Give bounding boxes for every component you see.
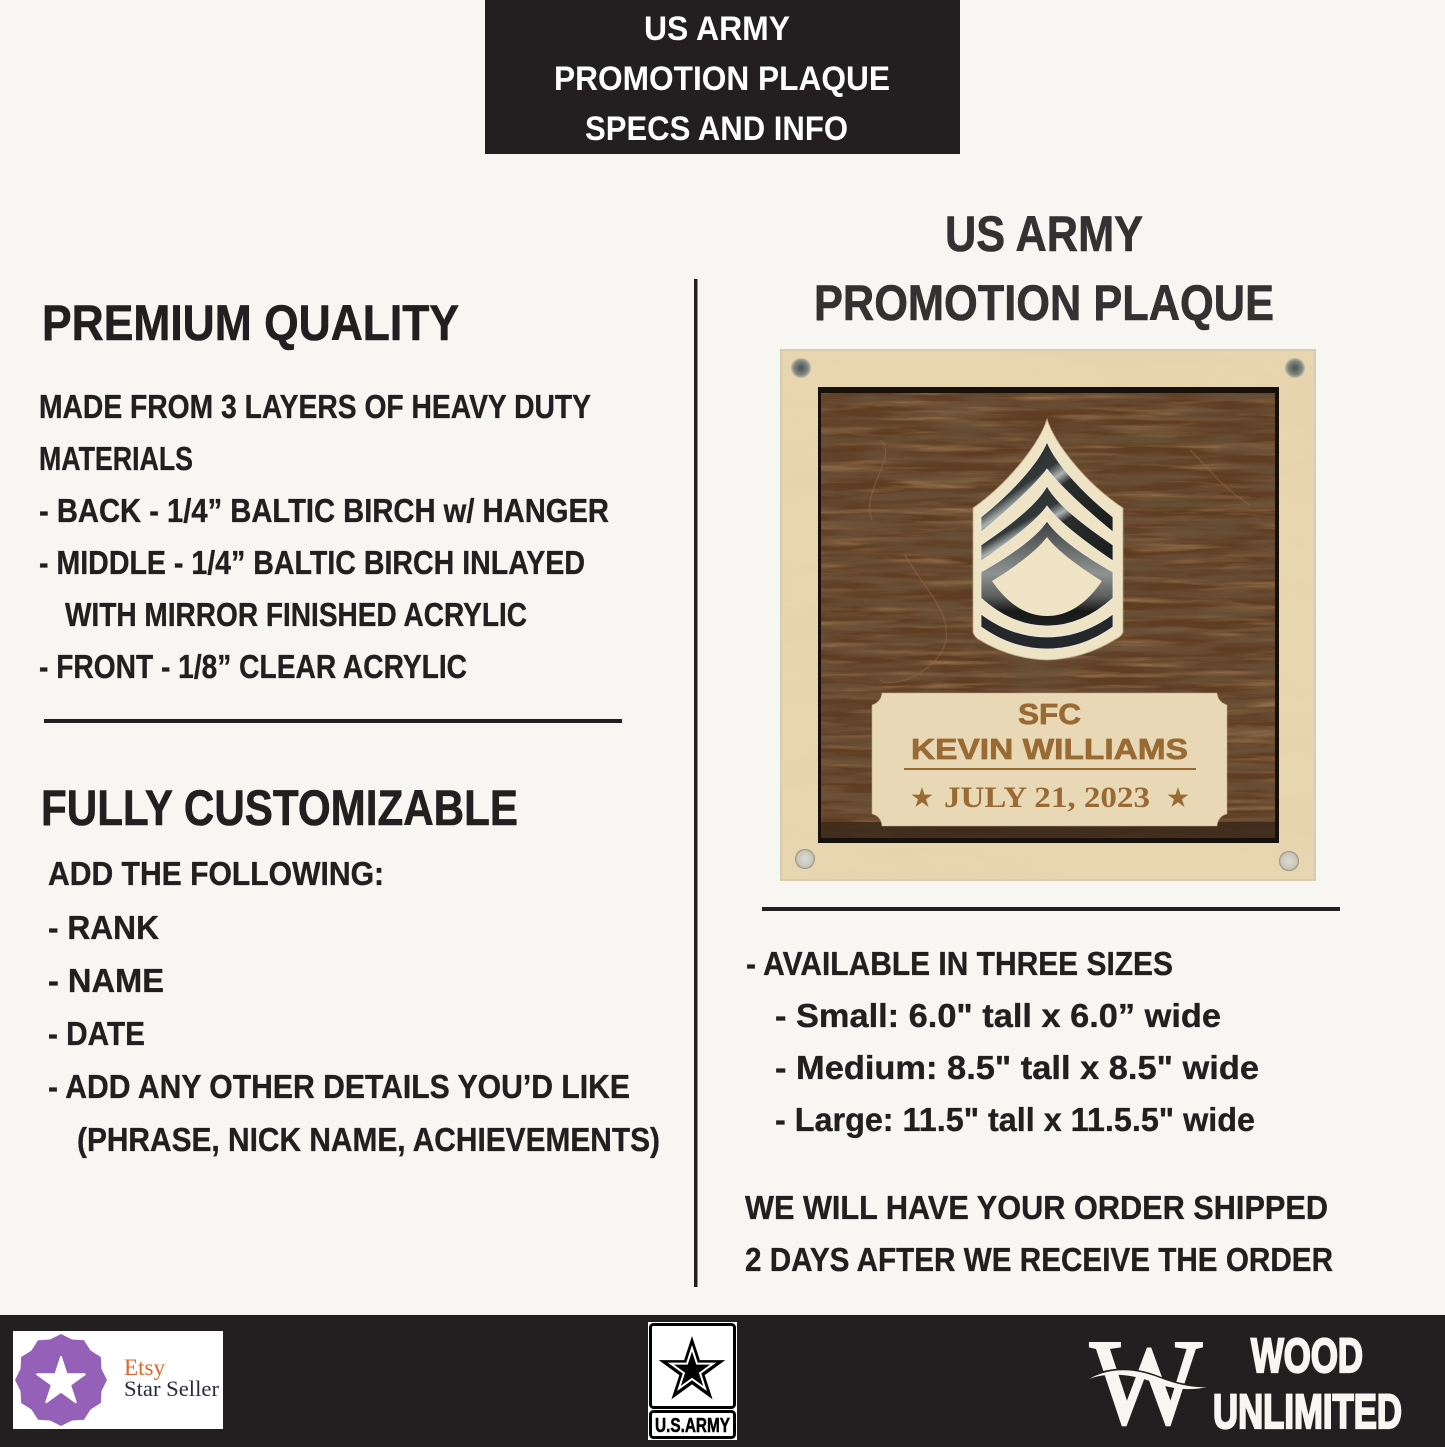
engraved name plate (872, 693, 1227, 826)
stained wood panel (818, 387, 1279, 843)
engraved name plate: SFC (1018, 699, 1081, 731)
etsy star seller badge: Etsy (124, 1355, 166, 1380)
text block: customization options: ADD THE FOLLOWING: (48, 855, 384, 892)
text block: available sizes: - Medium: 8.5" tall x 8.5" wide (775, 1049, 1259, 1086)
icon: w monogram with swoosh: W (1090, 1315, 1202, 1447)
heading: fully customizable: FULLY CUSTOMIZABLE (41, 780, 518, 836)
text block: customization options: - DATE (48, 1015, 145, 1052)
text block: customization options: - NAME (48, 962, 164, 999)
text block: materials: WITH MIRROR FINISHED ACRYLIC (65, 596, 527, 633)
panel: fully customizable (41, 780, 660, 1158)
text block: customization options: - ADD ANY OTHER DETAILS YOU’D LIKE (48, 1068, 630, 1105)
etsy star seller badge (13, 1331, 223, 1429)
text block: available sizes: - Small: 6.0" tall x 6.0” wide (775, 997, 1221, 1034)
title banner: SPECS AND INFO (585, 110, 848, 148)
footer bar (0, 1315, 1445, 1447)
screws (791, 358, 1305, 871)
title banner: PROMOTION PLAQUE (554, 60, 890, 98)
heading: us army promotion plaque: US ARMY (945, 206, 1143, 262)
text block: materials: - BACK - 1/4” BALTIC BIRCH w/ HANGER (39, 492, 609, 529)
text block: materials: MATERIALS (39, 440, 193, 477)
engraved name plate: JULY 21, 2023 (944, 781, 1150, 814)
us army logo: U.S.ARMY (655, 1415, 730, 1437)
text block: customization options (48, 855, 660, 1158)
heading: us army promotion plaque (814, 206, 1274, 331)
etsy star seller badge: Star Seller (124, 1376, 220, 1401)
wood unlimited logo: WOOD (1251, 1330, 1363, 1383)
rank insignia chevrons (973, 419, 1123, 660)
engraved name plate: KEVIN WILLIAMS (911, 734, 1188, 766)
text block: materials: - FRONT - 1/8” CLEAR ACRYLIC (39, 648, 467, 685)
text block: shipping note: WE WILL HAVE YOUR ORDER SHIPPED (745, 1189, 1328, 1226)
text block: customization options: (PHRASE, NICK NAME, ACHIEVEMENTS) (77, 1121, 660, 1158)
panel: premium quality (39, 295, 609, 685)
title banner (485, 0, 960, 154)
plaque photo (780, 349, 1316, 881)
text block: shipping note (745, 1189, 1333, 1278)
text block: customization options: - RANK (48, 909, 159, 946)
text block: available sizes: - Large: 11.5" tall x 11.5.5" wide (775, 1101, 1255, 1138)
title banner: US ARMY (644, 10, 790, 48)
text block: available sizes (746, 945, 1259, 1138)
text block: materials (39, 388, 609, 685)
text block: materials: - MIDDLE - 1/4” BALTIC BIRCH INLAYED (39, 544, 585, 581)
heading: premium quality: PREMIUM QUALITY (42, 295, 459, 351)
text block: available sizes: - AVAILABLE IN THREE SIZES (746, 945, 1173, 982)
text block: shipping note: 2 DAYS AFTER WE RECEIVE THE ORDER (745, 1241, 1333, 1278)
icon: purple star badge (15, 1334, 107, 1426)
us army logo (648, 1322, 737, 1440)
text block: materials: MADE FROM 3 LAYERS OF HEAVY DUTY (39, 388, 591, 425)
birch frame (782, 351, 1314, 879)
heading: us army promotion plaque: PROMOTION PLAQUE (814, 275, 1274, 331)
wood unlimited logo (1086, 1315, 1402, 1447)
